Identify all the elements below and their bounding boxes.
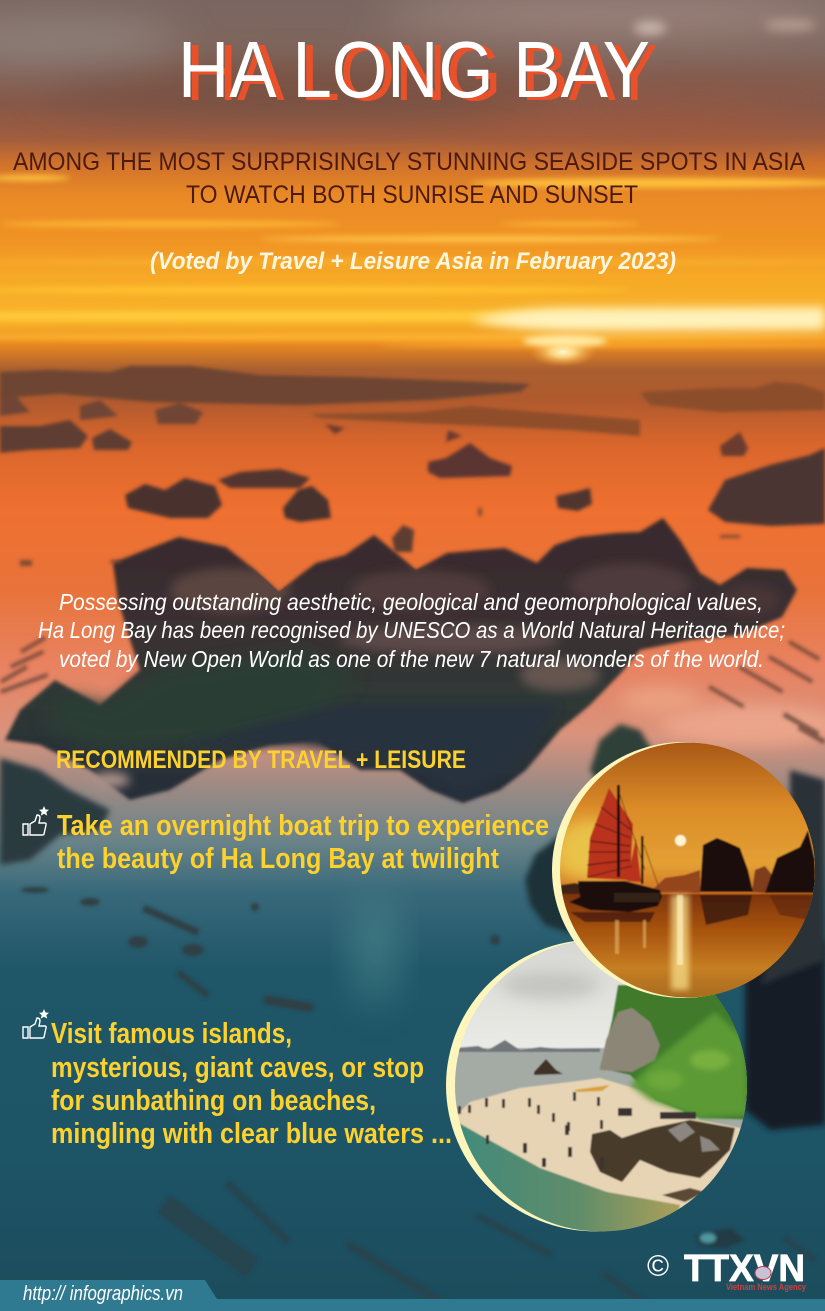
recommendation 1 text: the beauty of Ha Long Bay at twilight <box>57 843 499 875</box>
footer band with website tab <box>0 1280 825 1311</box>
logo: TTXVN Vietnam News Agency: Vietnam News Agency <box>726 1282 806 1292</box>
subtitle: TO WATCH BOTH SUNRISE AND SUNSET <box>186 181 638 209</box>
recommendation 2 text: Visit famous islands, <box>51 1018 292 1050</box>
description paragraph: Possessing outstanding aesthetic, geological and geomorphological values, <box>59 589 763 615</box>
logo: TTXVN Vietnam News Agency: TTXVN <box>684 1248 805 1290</box>
large central limestone islands and reflections <box>0 518 825 1130</box>
sky clouds <box>0 0 825 367</box>
description paragraph: voted by New Open World as one of the new 7 natural wonders of the world. <box>59 646 764 672</box>
icon: thumbs up 1 <box>23 806 49 835</box>
logo: TTXVN Vietnam News Agency: © <box>647 1250 669 1283</box>
icon: thumbs up 2 <box>23 1009 49 1038</box>
recommendation 1 text: Take an overnight boat trip to experience <box>57 810 549 842</box>
recommendation 2 text: mingling with clear blue waters ... <box>51 1118 452 1150</box>
distant ridges and islets <box>0 366 825 552</box>
voted note: (Voted by Travel + Leisure Asia in February 2023) <box>150 248 676 275</box>
description paragraph <box>38 589 785 672</box>
title: HA LONG BAY <box>186 28 658 117</box>
photo circle: beach <box>446 935 760 1240</box>
title: HA LONG BAY <box>178 25 650 114</box>
recommendation 2 text: for sunbathing on beaches, <box>51 1085 376 1117</box>
recommended heading: RECOMMENDED BY TRAVEL + LEISURE <box>56 746 466 774</box>
fish farms and boats on the water <box>0 508 825 1311</box>
photo circle: boat at sunset <box>552 740 820 1000</box>
website address: http:// infographics.vn <box>23 1283 183 1305</box>
recommendation 2 text <box>51 1018 452 1150</box>
subtitle <box>13 148 805 209</box>
recommendation 1 text <box>57 810 549 875</box>
recommendation 2 text: mysterious, giant caves, or stop <box>51 1052 424 1084</box>
